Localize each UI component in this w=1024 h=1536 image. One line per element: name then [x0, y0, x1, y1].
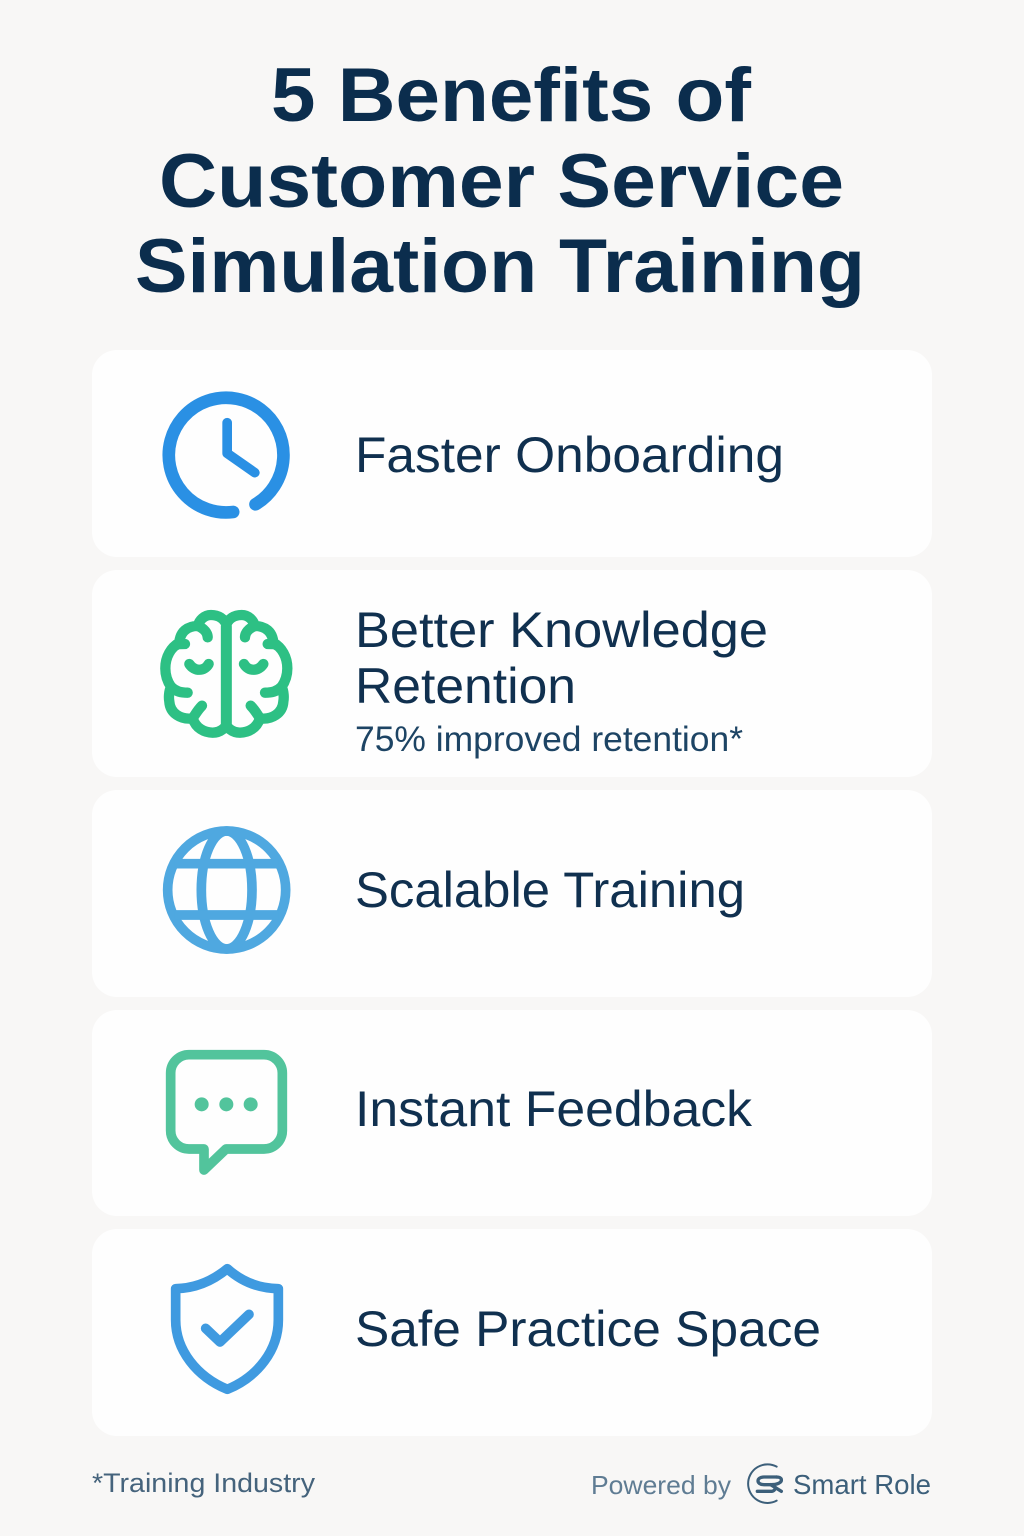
icon: speech bubble — [171, 1055, 282, 1170]
heading: better knowledge retention: Retention — [355, 658, 576, 714]
title: 5 Benefits of — [271, 53, 752, 138]
heading: instant feedback: Instant Feedback — [355, 1081, 753, 1137]
heading: safe practice space: Safe Practice Space — [355, 1301, 821, 1357]
icon: clock — [169, 398, 283, 512]
title: Simulation Training — [135, 224, 865, 309]
icon: shield with check — [176, 1269, 278, 1389]
heading: faster onboarding: Faster Onboarding — [355, 427, 784, 483]
stat: 75% improved retention: 75% improved retention* — [355, 720, 743, 759]
panel: faster onboarding — [92, 350, 932, 557]
panel: better knowledge retention — [92, 570, 932, 777]
footer: powered by smart role — [591, 1464, 931, 1503]
footer: powered by smart role: Powered by — [591, 1470, 731, 1500]
footnote: source: *Training Industry — [92, 1468, 316, 1498]
heading: better knowledge retention: Better Knowledge — [355, 602, 768, 658]
panel: scalable training — [92, 790, 932, 997]
icon: brain — [165, 615, 287, 733]
panel: safe practice space — [92, 1229, 932, 1436]
icon: smart role logo — [748, 1464, 781, 1503]
title — [135, 53, 865, 309]
heading: scalable training: Scalable Training — [355, 862, 745, 918]
heading: better knowledge retention — [355, 602, 768, 714]
panel: instant feedback — [92, 1010, 932, 1216]
brand name: Smart Role — [793, 1469, 931, 1500]
title: Customer Service — [159, 139, 844, 224]
icon: globe — [168, 831, 286, 949]
